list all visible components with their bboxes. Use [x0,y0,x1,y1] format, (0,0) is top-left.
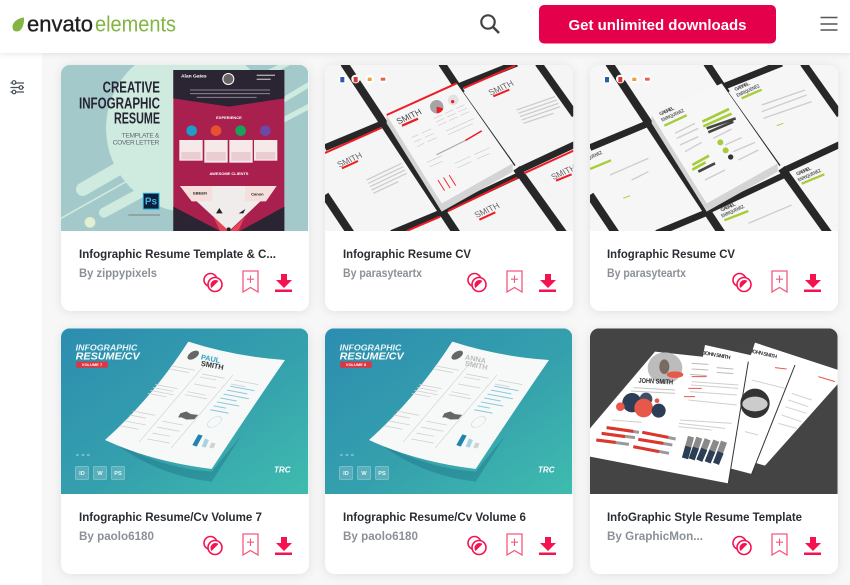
header bar [0,0,850,53]
thumbnail: teal resume volume 7 [61,328,308,494]
thumbnail: teal resume volume 7: RESUME/CV [76,351,141,362]
card: Infographic Resume Template [61,44,309,311]
thumbnail: teal resume volume 6: W [361,471,367,477]
card title: Infographic Resume Template & C... [79,247,276,261]
thumbnail: teal resume volume 7: TRC [274,465,291,474]
card author: By zippypixels [79,266,157,280]
thumbnail: teal resume volume 7: VOLUME 7 [82,362,103,367]
thumbnail: green isometric resume: GABRIEL [658,106,676,117]
card actions [204,271,292,292]
thumbnail: creative infographic resume: Ps [145,197,158,208]
thumbnail: creative infographic resume: INFOGRAPHIC [79,95,160,112]
card title: Infographic Resume/Cv Volume 6 [343,510,526,524]
card title: InfoGraphic Style Resume Template [607,510,802,524]
thumbnail: red isometric resume [325,63,578,233]
card author: By parasyteartx [607,266,686,280]
thumbnail: green isometric resume: ENRIQUENEZ [797,168,823,183]
thumbnail: creative infographic resume: TEMPLATE & [122,133,160,140]
thumbnail: creative infographic resume: Alan Gates [181,74,207,80]
thumbnail: red isometric resume: SMITH [486,78,515,97]
card author: By GraphicMon... [607,529,703,543]
thumbnail: teal resume volume 6: TRC [538,465,555,474]
card author: By paolo6180 [343,529,418,543]
card: InfoGraphic Style Resume Template [590,328,838,574]
left sidebar [0,53,42,585]
card actions [468,534,556,555]
card title: Infographic Resume CV [343,247,471,261]
thumbnail: teal resume volume 6: VOLUME 6 [346,362,367,367]
card author: By parasyteartx [343,266,422,280]
thumbnail: red isometric resume: SMITH [472,201,501,220]
thumbnail: creative infographic resume: EBEEN [193,191,207,196]
thumbnail: teal resume volume 7: W [97,471,103,477]
logo: envato elements: elements [95,12,176,36]
thumbnail: green isometric resume: GABRIEL [795,166,813,177]
thumbnail: red isometric resume: SMITH [335,150,364,169]
logo: envato elements: envato [27,12,93,36]
thumbnail: creative infographic resume: EXPERIENCE [216,115,242,120]
thumbnail: creative infographic resume: RESUME [114,111,160,128]
button: get unlimited downloads [539,5,776,44]
thumbnail: teal resume volume 6 [325,328,572,494]
thumbnail: teal resume volume 6: INFOGRAPHIC [340,344,402,353]
card actions [204,534,292,555]
button: get unlimited downloads: Get unlimited downloads [568,17,746,34]
thumbnail: teal resume volume 7: PS [114,471,122,477]
thumbnail: creative infographic resume: COVER LETTER [113,140,160,147]
thumbnail: teal resume volume 7: INFOGRAPHIC [76,344,138,353]
thumbnail: red isometric resume: SMITH [549,163,578,182]
card: Infographic Resume/Cv Volume 7 [61,328,309,574]
thumbnail: creative infographic resume: CREATIVE [103,80,160,97]
card: Infographic Resume/Cv Volume 6 [325,328,573,574]
thumbnail: red isometric resume: SMITH [394,107,423,126]
thumbnail: teal resume volume 6: ID [343,471,349,477]
card actions [468,271,556,292]
card: Infographic Resume CV green [578,63,840,311]
icon: filter sliders [10,81,24,94]
thumbnail: teal resume volume 7: SMITH [200,359,224,372]
thumbnail: dark background resume sheets: JOHN SMITH [750,348,778,360]
thumbnail: teal resume volume 7: PAUL [200,352,222,365]
thumbnail: green isometric resume [578,63,840,233]
card title: Infographic Resume CV [607,247,735,261]
thumbnail: dark background resume sheets [590,328,838,494]
thumbnail: teal resume volume 6: PS [378,471,386,477]
thumbnail: green isometric resume: GABRIEL [720,202,737,213]
thumbnail: creative infographic resume: AWESOME CLIENTS [210,171,249,176]
thumbnail: creative infographic resume: Canon [251,191,264,196]
icon: menu [820,18,838,30]
thumbnail: teal resume volume 6: ANNA [464,352,487,365]
thumbnail: green isometric resume: GABRIEL [734,81,751,93]
logo: envato elements [12,12,176,36]
card actions [733,534,821,555]
thumbnail: teal resume volume 6: RESUME/CV [340,351,405,362]
thumbnail: dark background resume sheets: JOHN SMITH [702,350,731,361]
icon: search [481,15,499,33]
thumbnail: teal resume volume 6: SMITH [464,359,488,372]
thumbnail: green isometric resume: ENRIQUENEZ [720,204,746,219]
card actions [733,271,821,292]
thumbnail: green isometric resume: ENRIQUENEZ [578,150,604,165]
thumbnail: dark background resume sheets: JOHN SMITH [638,378,673,386]
card: Infographic Resume CV red [325,63,578,311]
card title: Infographic Resume/Cv Volume 7 [79,510,262,524]
thumbnail: green isometric resume: ENRIQUENEZ [736,83,761,99]
thumbnail: teal resume volume 7: ID [79,471,85,477]
thumbnail: green isometric resume: ENRIQUENEZ [660,108,686,123]
card author: By paolo6180 [79,529,154,543]
thumbnail: creative infographic resume [61,65,308,231]
